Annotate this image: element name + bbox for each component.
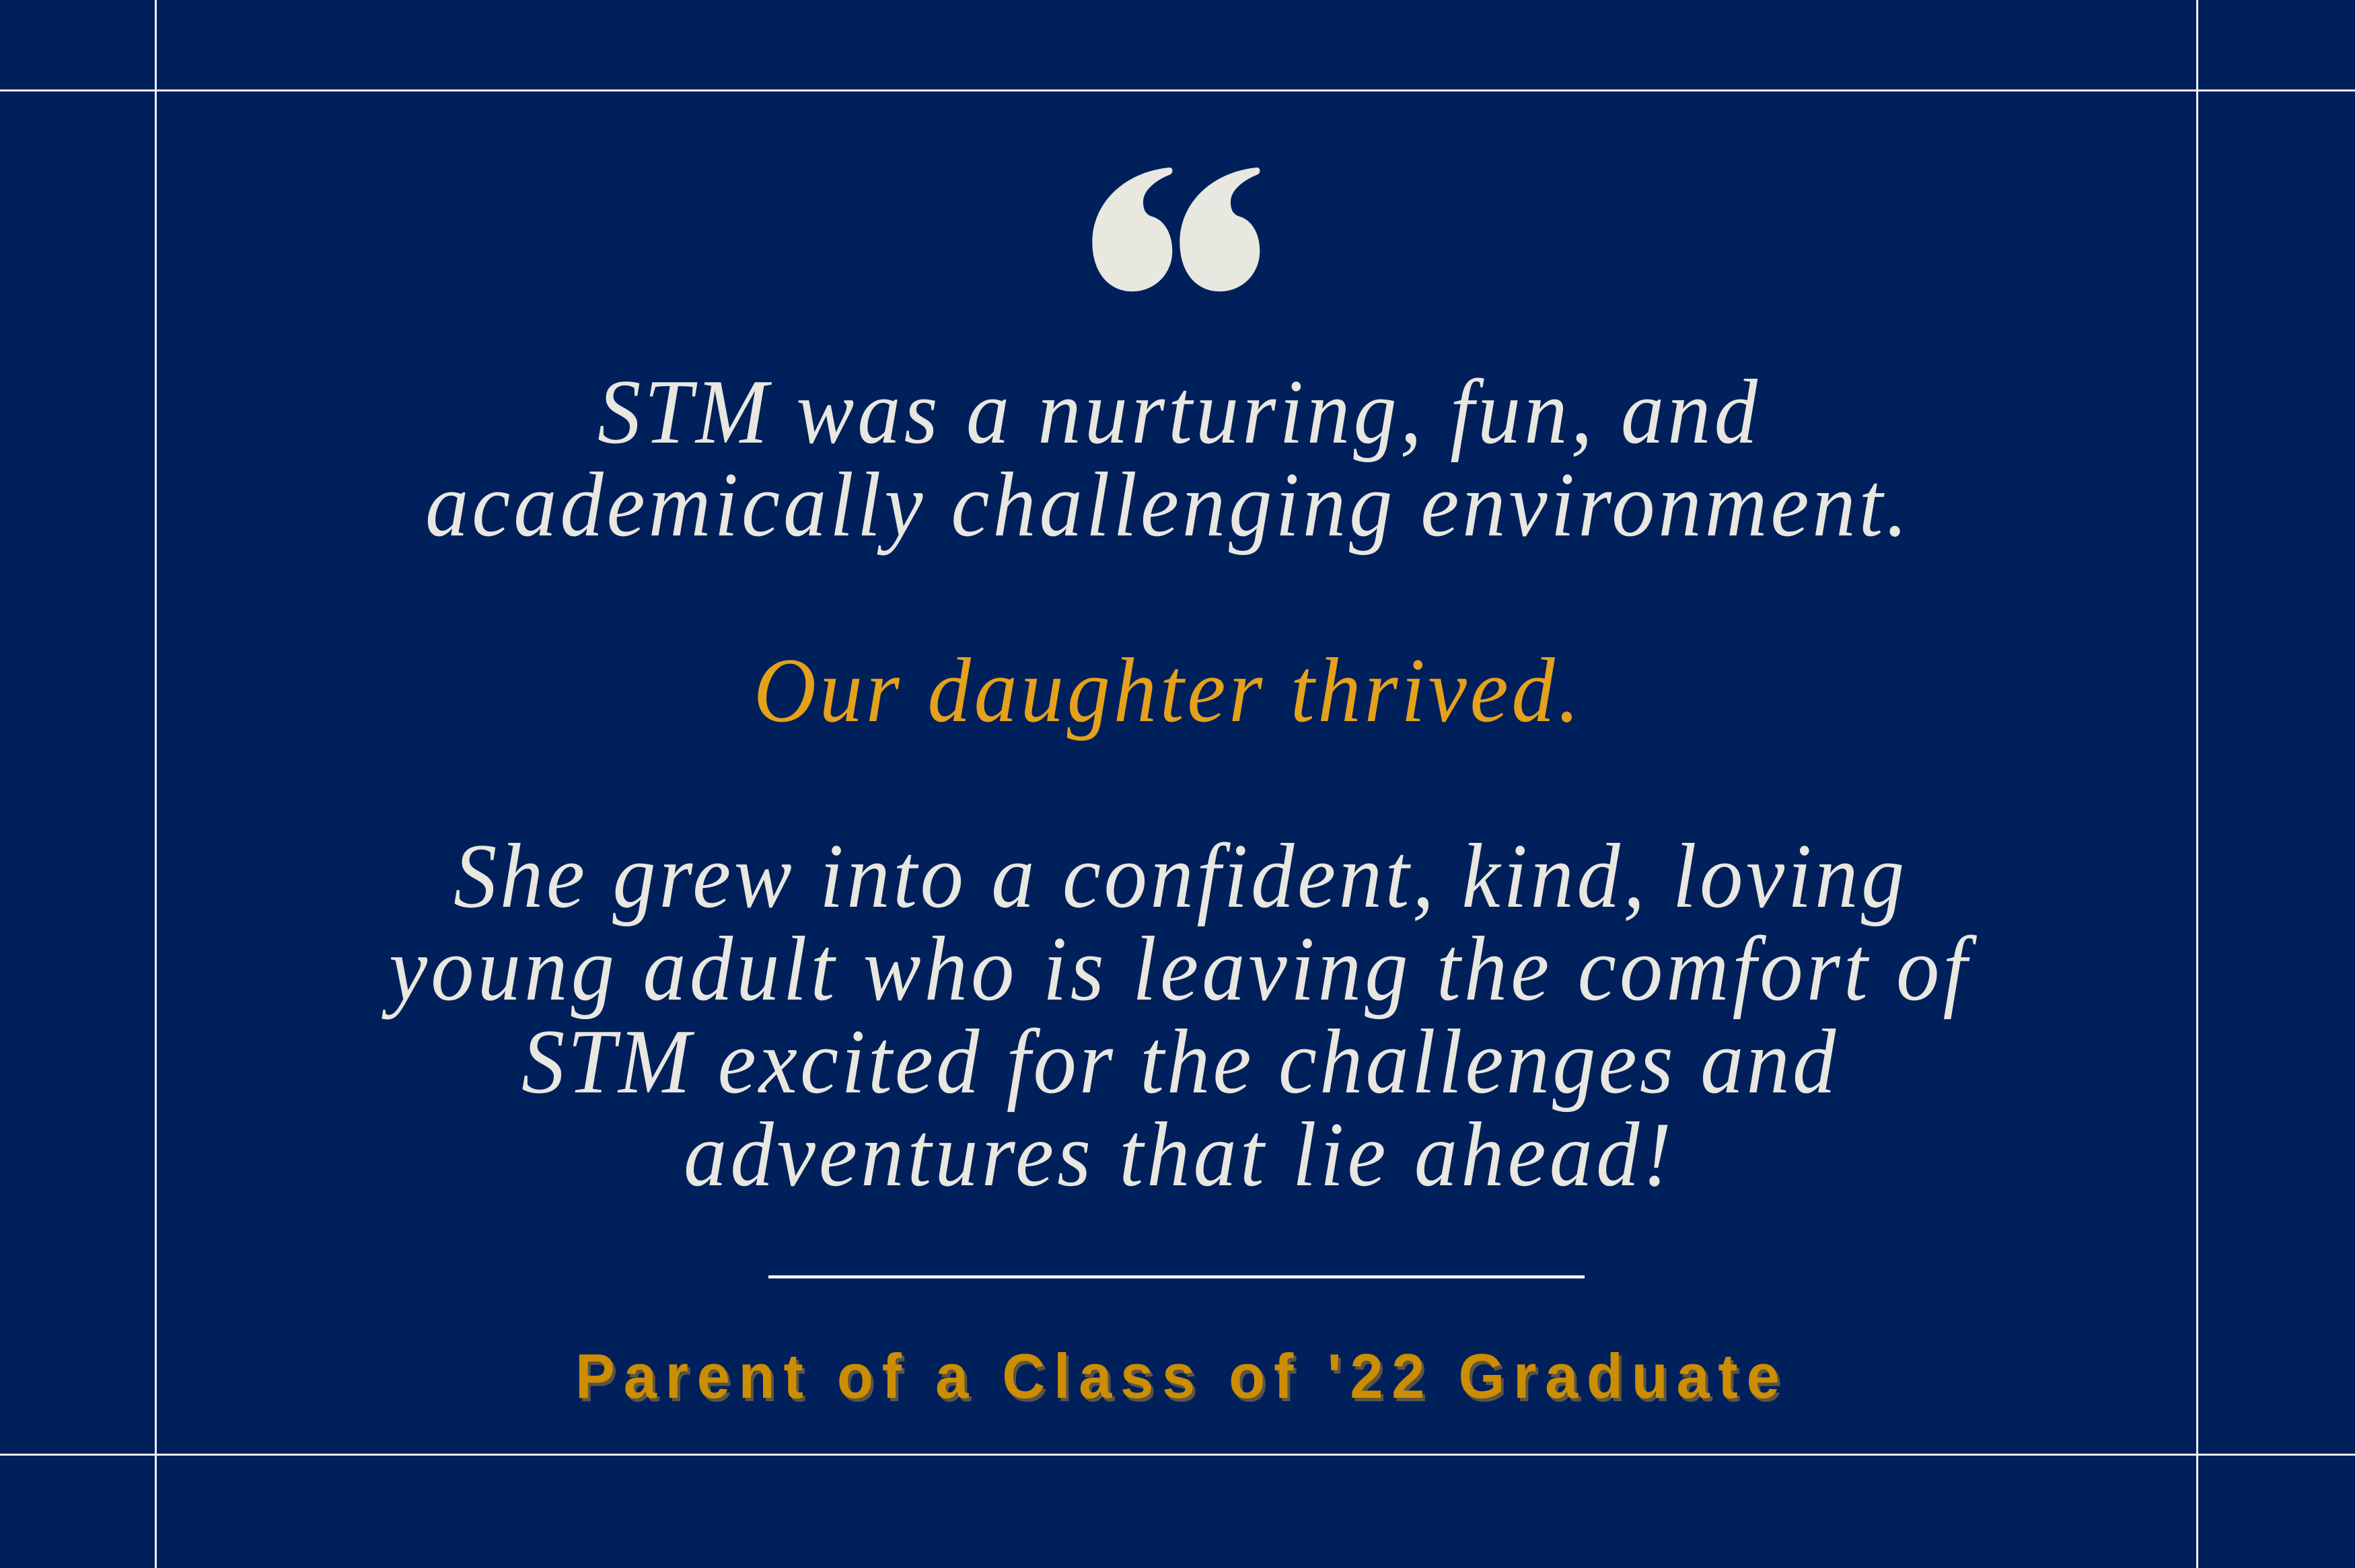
quote text: opening sentence (425, 361, 1908, 556)
icon: opening quotation marks (1092, 167, 1260, 291)
attribution: Parent of a Class of '22 Graduate (578, 1345, 1782, 1415)
quote text: opening sentence: STM was a nurturing, fun, and (597, 361, 1758, 463)
divider (768, 1275, 1585, 1278)
quote text: closing sentence: STM excited for the challenges and (521, 1010, 1836, 1113)
attribution: Parent of a Class of '22 Graduate (575, 1341, 1780, 1412)
quote text: closing sentence: adventures that lie ahead! (684, 1103, 1671, 1205)
quote text: closing sentence: young adult who is leaving the comfort of (381, 918, 1978, 1020)
quote text: closing sentence: She grew into a confident, kind, loving (454, 825, 1904, 927)
quote text: closing sentence (381, 825, 1978, 1205)
quote text: opening sentence: academically challenging environment. (425, 453, 1908, 556)
quote text: gold highlight: Our daughter thrived. (754, 639, 1580, 741)
